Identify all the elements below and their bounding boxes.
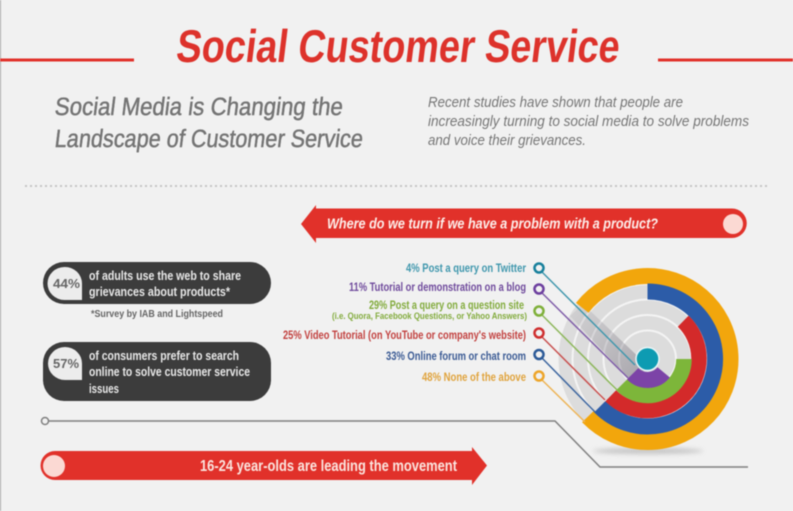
bottom banner arrow bbox=[41, 447, 487, 485]
label: question site: (i.e. Quora, Facebook Questions, or Yahoo Answers) bbox=[332, 311, 527, 322]
subheading bbox=[53, 93, 365, 153]
stat pill: 44%: 44% bbox=[53, 277, 80, 291]
label: blog: 11% Tutorial or demonstration on a blog bbox=[349, 282, 526, 294]
header rule left bbox=[0, 58, 134, 62]
marker: blog bbox=[534, 284, 628, 378]
marker: question site bbox=[534, 306, 617, 390]
label: question site bbox=[332, 300, 527, 322]
title: Social Customer Service bbox=[174, 20, 623, 72]
intro text: and voice their grievances. bbox=[428, 133, 586, 149]
marker: forum bbox=[534, 350, 595, 412]
intro text: Recent studies have shown that people are bbox=[428, 95, 683, 111]
label: question site: 29% Post a query on a question site bbox=[369, 300, 524, 312]
leader lines and markers bbox=[534, 264, 635, 422]
stat pill: 57%: of consumers prefer to search bbox=[89, 349, 239, 363]
center dot bbox=[636, 348, 659, 370]
ring: none of the above 48% bbox=[582, 276, 730, 442]
stat pill: 57%: 57% bbox=[53, 357, 79, 371]
label: forum: 33% Online forum or chat room bbox=[386, 351, 526, 363]
stat pill: 44%: of adults use the web to share bbox=[89, 269, 241, 283]
timeline connector bbox=[42, 418, 748, 467]
label: none: 48% None of the above bbox=[422, 372, 526, 384]
top banner arrow: Where do we turn if we have a problem with a product? bbox=[327, 216, 658, 232]
concentric ring chart bbox=[558, 270, 736, 448]
marker: none bbox=[534, 372, 585, 422]
stat pill: 57%: issues bbox=[89, 382, 119, 396]
survey footnote: *Survey by IAB and Lightspeed bbox=[91, 309, 223, 320]
top banner arrow bbox=[301, 205, 747, 243]
marker: twitter bbox=[534, 264, 635, 365]
subheading: Landscape of Customer Service bbox=[53, 125, 365, 153]
intro text bbox=[428, 95, 749, 149]
stat pill: 57%: online to solve customer service bbox=[89, 365, 250, 379]
marker: video bbox=[534, 328, 605, 400]
header rule right bbox=[658, 58, 793, 62]
bottom banner arrow: 16-24 year-olds are leading the movement bbox=[200, 458, 457, 475]
donut shadow bbox=[593, 448, 703, 454]
stat pill: 44%: grievances about products* bbox=[89, 285, 230, 299]
stat pill: 44% bbox=[43, 262, 271, 304]
ring: question site 29% bbox=[622, 359, 684, 395]
ring: video tutorial 25% bbox=[611, 321, 699, 411]
label: video tutorial: 25% Video Tutorial (on YouTube or company's website) bbox=[283, 330, 526, 342]
survey answer labels bbox=[283, 263, 527, 384]
stat pill: 57% bbox=[43, 342, 271, 401]
ring: online forum 33% bbox=[600, 291, 715, 426]
subheading: Social Media is Changing the bbox=[53, 93, 345, 121]
label: twitter: 4% Post a query on Twitter bbox=[406, 263, 526, 275]
shaded band on rings bbox=[570, 304, 650, 378]
dotted divider bbox=[25, 185, 770, 187]
intro text: increasingly turning to social media to solve problems bbox=[428, 114, 749, 130]
ring: blog 11% bbox=[633, 372, 664, 380]
